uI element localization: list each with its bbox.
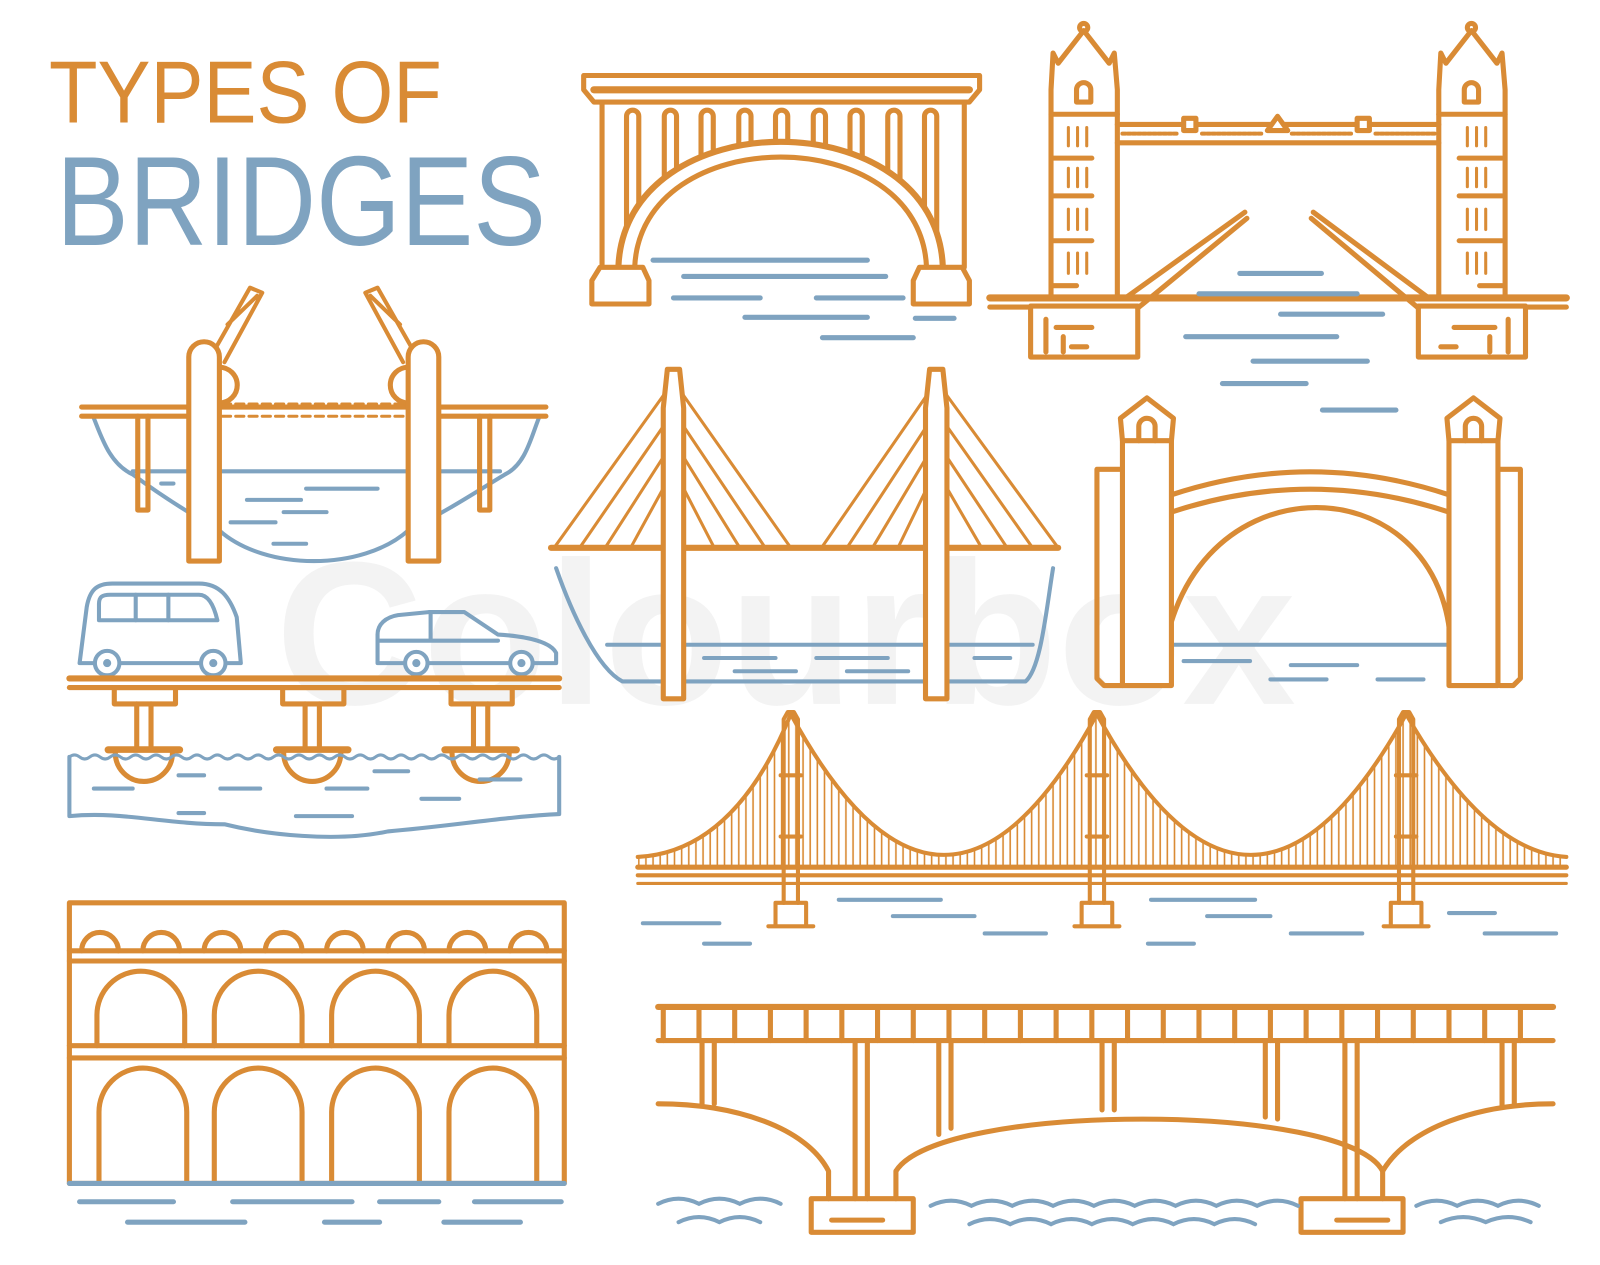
bridge: tower bridge bbox=[990, 23, 1566, 357]
bridge: deck arch bridge bbox=[658, 1007, 1553, 1232]
title: BRIDGES bbox=[56, 131, 546, 273]
water: deck arch bridge bbox=[658, 1199, 1539, 1224]
bridge: aqueduct bbox=[69, 903, 564, 1183]
bridge: pontoon with vehicles bbox=[69, 584, 559, 837]
title bbox=[49, 43, 546, 273]
bridge: bascule bbox=[82, 288, 546, 561]
bridge: arch with towers bbox=[1097, 398, 1520, 686]
watermark: Colourbox bbox=[276, 520, 1296, 748]
water: arch bridge bbox=[653, 260, 954, 338]
title: TYPES OF bbox=[49, 43, 442, 141]
bridge: suspension bbox=[638, 704, 1566, 944]
bridge: cable-stayed bbox=[551, 369, 1058, 699]
water: aqueduct bbox=[69, 1183, 564, 1222]
bridge: classic arch bbox=[584, 75, 980, 304]
water: tower bridge bbox=[1186, 273, 1396, 410]
